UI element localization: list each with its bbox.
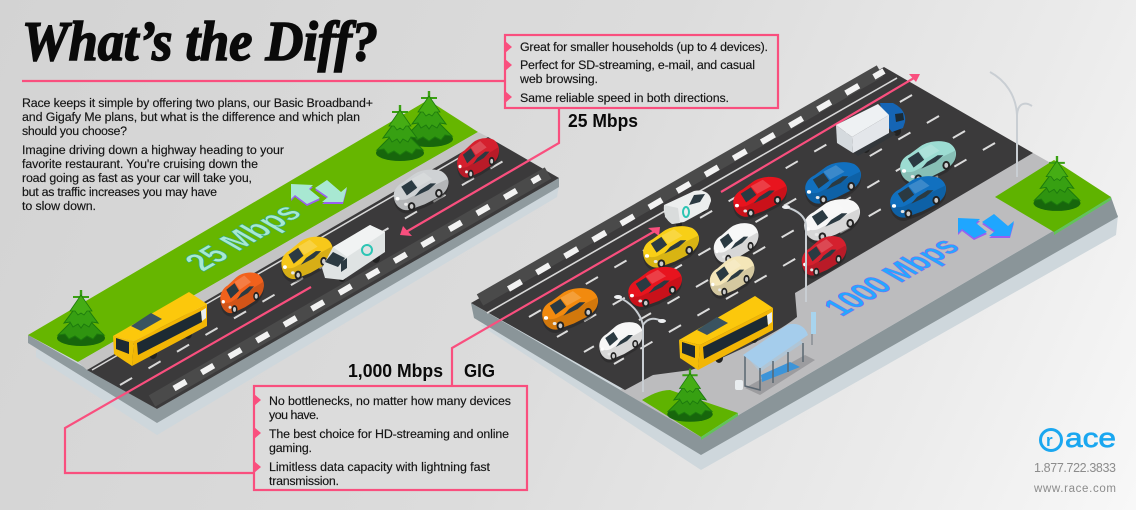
callout text: No bottlenecks, no matter how many devices	[269, 394, 511, 408]
bullets	[505, 41, 512, 103]
callout text: you have.	[269, 408, 319, 422]
sidewalk	[620, 153, 1111, 437]
intro text: should you choose?	[22, 124, 127, 138]
label: GIG: GIG	[464, 361, 495, 381]
bus	[113, 292, 207, 366]
cars	[542, 141, 956, 363]
bus	[679, 296, 773, 370]
phone number: 1.877.722.3833	[1034, 461, 1116, 475]
car: white 2	[714, 223, 758, 266]
callout: 25 Mbps plan	[22, 35, 778, 108]
asphalt	[471, 67, 1033, 390]
callout text: Same reliable speed in both directions.	[520, 91, 729, 105]
trash bin	[735, 380, 743, 390]
car: orange	[542, 288, 598, 333]
trees	[667, 156, 1081, 422]
road label: 1000 Mbps: 1000 Mbps	[815, 232, 968, 321]
car: red 1	[733, 177, 787, 220]
intro text: and Gigafy Me plans, but what is the difference and which plan	[22, 110, 360, 124]
callout text: Great for smaller households (up to 4 devices).	[520, 40, 768, 54]
green patch: right	[995, 160, 1111, 235]
speed arrows	[958, 214, 1014, 240]
bullets	[254, 394, 261, 473]
website: www.race.com	[1033, 483, 1116, 495]
callout text: transmission.	[269, 474, 339, 488]
car: taxi	[643, 226, 699, 271]
callout text: The best choice for HD-streaming and online	[269, 427, 509, 441]
intro text: to slow down.	[22, 199, 96, 213]
bus stop sign	[811, 312, 816, 345]
label: 25 Mbps: 25 Mbps	[568, 111, 638, 131]
trees	[57, 91, 453, 346]
sidewalk strip	[78, 132, 488, 370]
logo: race	[1040, 423, 1116, 453]
car: cream	[710, 256, 754, 299]
callout text	[519, 40, 768, 105]
green patch: bottom	[642, 390, 738, 440]
car: white 3	[599, 322, 643, 363]
road markings	[92, 140, 517, 385]
white van	[664, 190, 711, 228]
car: white 1	[804, 199, 860, 244]
bus shelter	[743, 324, 815, 395]
barrier	[480, 71, 884, 300]
platform shadow	[471, 197, 1118, 470]
intro text: favorite restaurant. You're cruising down the	[22, 157, 258, 171]
panel: 25 Mbps road	[28, 91, 559, 435]
car: teal	[900, 141, 956, 186]
car: orange	[220, 272, 264, 316]
pink connector: 1000 Mbps lower	[65, 287, 311, 473]
grass verge	[28, 100, 478, 362]
pink connector: gig	[452, 74, 920, 386]
intro text: Imagine driving down a highway heading to your	[22, 143, 284, 157]
title: What’s the Diff?	[22, 11, 378, 73]
truck	[836, 103, 905, 156]
callout text: Perfect for SD-streaming, e-mail, and casual	[520, 58, 755, 72]
intro text	[22, 96, 373, 213]
callout: gig plan	[254, 386, 527, 490]
panel: 1000 Mbps road	[452, 67, 1118, 470]
car: silver	[394, 169, 449, 213]
logo: race: r	[1046, 431, 1053, 450]
callout text	[269, 394, 511, 488]
car: blue 2	[890, 176, 946, 221]
car: red	[457, 138, 499, 181]
road markings	[487, 78, 995, 364]
car: red small	[802, 236, 846, 279]
asphalt	[87, 137, 559, 409]
intro text: but as traffic increases you may have	[22, 185, 217, 199]
barrier	[152, 173, 548, 401]
van	[322, 225, 385, 282]
logo: race: ace	[1065, 423, 1116, 453]
pink connector: 25 Mbps	[400, 108, 559, 236]
car: taxi	[281, 237, 333, 282]
mint arrows	[291, 180, 347, 206]
callout text: Limitless data capacity with lightning fast	[269, 460, 491, 474]
car: blue 1	[805, 162, 861, 207]
road label: 25 Mbps: 25 Mbps	[176, 198, 310, 276]
intro text: Race keeps it simple by offering two plans, our Basic Broadband+	[22, 96, 373, 110]
car: red 2	[628, 267, 682, 310]
road shadow	[28, 178, 559, 435]
callout text: web browsing.	[519, 72, 598, 86]
street lamps	[614, 72, 1032, 392]
label: 1,000 Mbps: 1,000 Mbps	[348, 361, 443, 381]
intro text: road going as fast as your car will take you,	[22, 171, 252, 185]
callout text: gaming.	[269, 441, 312, 455]
